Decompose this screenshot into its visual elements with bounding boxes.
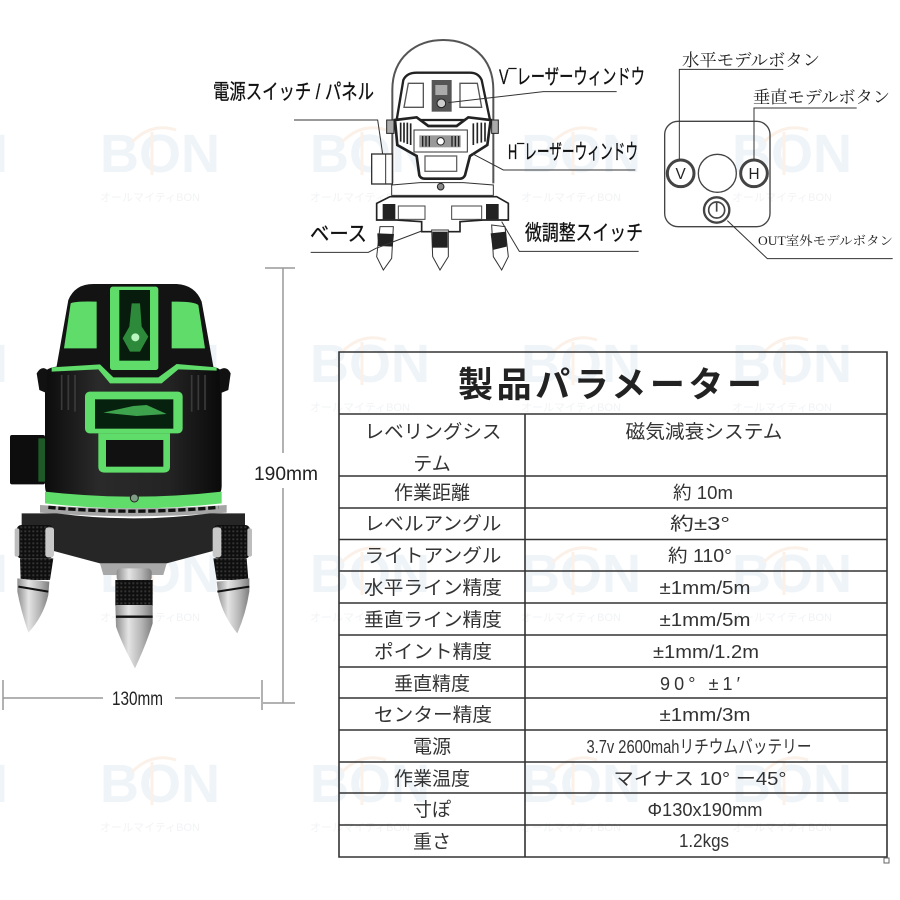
background watermark tiles: BON [732,124,852,184]
side knobs [387,120,498,133]
background watermark tiles: BON [521,754,641,814]
background watermark tiles: BON [732,544,852,604]
row: verticality: 垂直精度 [394,673,470,695]
left foot [15,525,54,633]
background watermark tiles [0,124,852,834]
row: leveling system: 磁気減衰システム [626,421,782,443]
dimension: height 190mm [254,268,318,703]
label: vertical mode button: 垂直モデルボタン [753,88,890,107]
cast base [22,513,245,563]
handle arc [392,40,493,183]
background watermark tiles: BON [521,124,641,184]
row: vertical line accuracy: 垂直ライン精度 [364,609,502,631]
row: leveling system: レベリングシス [364,421,502,443]
background watermark tiles: オールマイティBON [100,611,200,624]
background watermark tiles: オールマイティBON [100,191,200,204]
row: working distance: 作業距離 [394,482,470,504]
background watermark tiles: オールマイティBON [310,611,410,624]
row: power source [413,736,812,758]
side grille [401,123,485,145]
leader lines [294,92,639,252]
row: vertical line accuracy: ±1mm/5m [660,610,750,630]
product photo: green laser level [10,284,252,668]
background watermark tiles: オールマイティBON [732,821,832,834]
V button: V [676,166,687,183]
label: horizontal mode button: 水平モデルボタン [682,51,820,70]
base knobs [383,204,395,219]
row: point accuracy: ポイント精度 [374,641,492,663]
power button [704,197,729,223]
row: horizontal line accuracy: 水平ライン精度 [364,577,502,599]
ring [392,183,493,195]
row: verticality [394,673,741,695]
background watermark tiles: BON [310,754,430,814]
body [45,366,222,501]
row: horizontal line accuracy: ±1mm/5m [660,578,750,598]
background watermark tiles: オールマイティBON [521,611,621,624]
V button [667,160,694,187]
small resize handle [884,858,889,863]
background watermark tiles: BON [310,544,430,604]
row: light angle: 約 110° [668,546,732,566]
background watermark tiles: BON [521,334,641,394]
table title: 製品パラメーター [458,366,762,405]
label: outdoor mode button: OUT室外モデルボタン [758,234,893,248]
row: center accuracy: センター精度 [374,704,492,726]
dimension: width 130mm: 130mm [112,689,163,710]
lower display frame [98,433,170,473]
vertical window frame [110,287,158,370]
H button: H [748,166,760,183]
background watermark tiles: BON [100,334,220,394]
background watermark tiles: オールマイティBON [310,191,410,204]
line diagram: laser level front view [294,40,639,270]
row: power source: 電源 [413,736,451,758]
background watermark tiles: オールマイティBON [732,401,832,414]
row: weight: 重さ [413,831,451,853]
row: light angle [364,545,732,567]
left head window [64,302,97,348]
side clips [37,368,231,393]
right head window [172,302,205,348]
leader lines [679,69,893,259]
background watermark tiles: オールマイティBON [100,821,200,834]
row: power source: 3.7v 2600mahリチウムバッテリー [586,737,812,757]
head [53,284,217,385]
row: light angle: ライトアングル [364,545,502,567]
silver ring [40,505,227,516]
grille [62,375,205,412]
horizontal laser line [103,405,167,416]
background watermark tiles: BON [100,754,220,814]
row: center accuracy [374,704,750,726]
background watermark tiles: BON [732,754,852,814]
center circle [698,154,736,192]
row: leveling system: テム [413,454,451,475]
button panel diagram [665,69,893,259]
background watermark tiles: BON [100,124,220,184]
row: dimensions: Φ130x190mm [648,800,762,820]
side battery box [10,435,55,484]
center foot [115,568,153,668]
background watermark tiles: BON [310,334,430,394]
label: fine adjustment switch: 微調整スイッチ [525,222,643,245]
row: dimensions: 寸ぽ [413,799,451,821]
right foot [213,525,252,633]
row: working temperature [394,768,786,790]
green ring [45,492,222,508]
row: working distance: 約 10m [673,483,733,503]
row: point accuracy [374,641,759,663]
background watermark tiles: オールマイティBON [521,401,621,414]
background watermark tiles: BON [732,334,852,394]
background watermark tiles: オールマイティBON [310,821,410,834]
row: working distance [394,482,733,504]
label: power switch / panel: 電源スイッチ / パネル [213,81,374,104]
body dark shoulder panel [395,117,491,179]
dimension: width 130mm [3,680,262,710]
feet [377,225,508,270]
background watermark tiles: BON [310,124,430,184]
parameter table [339,352,887,857]
label: H laser window: H¯レーザーウィンドウ [508,141,638,164]
row: working temperature: マイナス 10° ー45° [614,769,786,789]
background watermark tiles: オールマイティBON [521,821,621,834]
label: V laser window: V¯レーザーウィンドウ [499,66,645,89]
upper head outline [397,73,490,120]
row: level angle [364,513,730,535]
row: center accuracy: ±1mm/3m [660,705,750,725]
panel outline [665,121,770,227]
background watermark tiles: オールマイティBON [732,191,832,204]
H button [741,160,767,187]
row: level angle: 約±3° [670,514,730,534]
row: level angle: レベルアングル [364,513,502,535]
row: verticality: 90° ±1′ [660,674,741,694]
background watermark tiles: BON [521,544,641,604]
background watermark tiles: オールマイティBON [100,401,200,414]
horizontal window frame [85,392,183,433]
base center post [100,563,167,575]
head windows [404,83,482,107]
row: working temperature: 作業温度 [394,768,470,790]
dimension: height 190mm: 190mm [254,464,318,485]
row: horizontal line accuracy [364,577,750,599]
background watermark tiles: オールマイティBON [732,611,832,624]
background watermark tiles: BON [100,544,220,604]
row: dimensions [413,799,762,821]
green shoulder band [52,364,217,383]
base plate [377,197,508,232]
front panel window [414,130,467,152]
side switch box [372,154,392,184]
row: vertical line accuracy [364,609,750,631]
row: leveling system [364,421,782,475]
row: point accuracy: ±1mm/1.2m [653,642,759,662]
background watermark tiles: オールマイティBON [310,401,410,414]
table grid [339,352,887,857]
label: base: ベース [310,223,367,246]
row: weight: 1.2kgs [679,831,729,851]
row: weight [413,831,729,853]
vertical laser burst [123,303,148,352]
vertical laser window [432,80,452,112]
background watermark tiles: オールマイティBON [521,191,621,204]
